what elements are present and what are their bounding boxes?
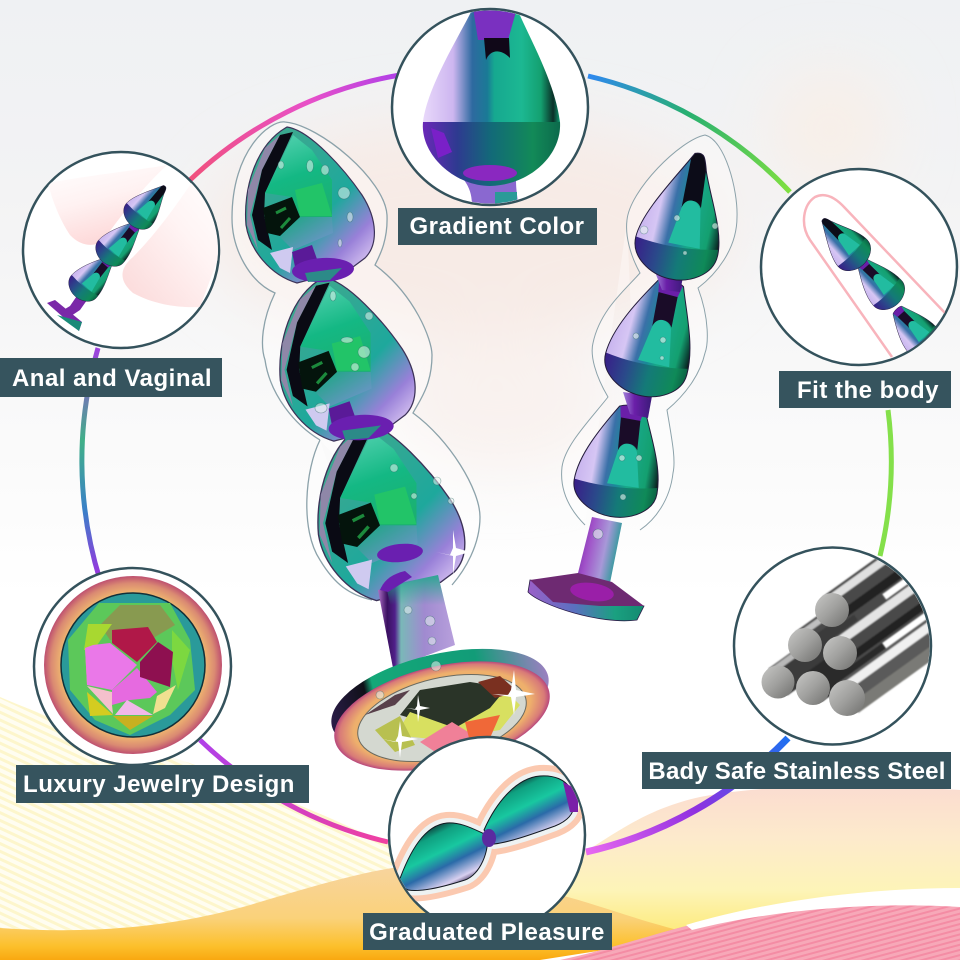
- label: fit the body: Fit the body: [797, 377, 939, 404]
- bead 3 collar: [376, 542, 424, 564]
- bead 1 neck: [291, 245, 355, 284]
- small bead 1: [624, 140, 742, 300]
- small outline: [562, 135, 737, 530]
- callout: graduated pleasure: [389, 737, 585, 933]
- label: fit the body: [779, 371, 951, 408]
- base side band: [321, 630, 559, 772]
- label: luxury jewelry: [16, 765, 309, 803]
- bead 3: [318, 423, 465, 601]
- rainbow ring: [82, 75, 891, 852]
- label: graduated pleasure: Graduated Pleasure: [369, 919, 605, 946]
- stem tint: [386, 575, 447, 625]
- callout: anal and vaginal: [23, 152, 225, 348]
- small product: [528, 135, 742, 621]
- callout: fit the body: [761, 169, 957, 368]
- base jewel: [349, 660, 535, 776]
- small stem: [577, 517, 622, 583]
- label: anal and vaginal: [0, 358, 222, 397]
- callout: luxury jewelry: [34, 568, 231, 765]
- stem collar: [380, 571, 412, 592]
- small neck 1: [655, 272, 684, 292]
- large product: [232, 122, 560, 789]
- label: gradient color: Gradient Color: [409, 213, 585, 240]
- wave backdrop: [0, 697, 960, 960]
- label: anal and vaginal: Anal and Vaginal: [12, 365, 212, 392]
- icon: steel rods: [762, 558, 930, 716]
- small neck 2: [623, 392, 652, 418]
- icon: graduated beads: [398, 776, 578, 891]
- product outline: [232, 122, 480, 600]
- small base side: [528, 580, 644, 621]
- label: gradient color: [398, 208, 597, 245]
- label: stainless steel: Bady Safe Stainless Steel: [648, 758, 946, 785]
- water droplets: [278, 160, 454, 699]
- bead 2: [280, 277, 415, 441]
- icon: jewel: [44, 576, 222, 754]
- icon: teardrop close-up: [423, 8, 560, 206]
- stem: [378, 575, 455, 668]
- small bead 3: [565, 397, 673, 535]
- bead 2 neck: [328, 401, 394, 442]
- sparkles: [382, 530, 535, 758]
- small base collar: [569, 580, 615, 604]
- label: graduated pleasure: [363, 913, 612, 950]
- small base top: [530, 573, 644, 606]
- small droplets: [593, 215, 718, 539]
- callout: stainless steel: [732, 546, 932, 746]
- small bead 2: [592, 267, 712, 418]
- callout: gradient color: [392, 8, 588, 206]
- bead 1: [246, 127, 374, 283]
- base rim: [324, 643, 560, 789]
- label: luxury jewelry: Luxury Jewelry Design: [23, 771, 295, 798]
